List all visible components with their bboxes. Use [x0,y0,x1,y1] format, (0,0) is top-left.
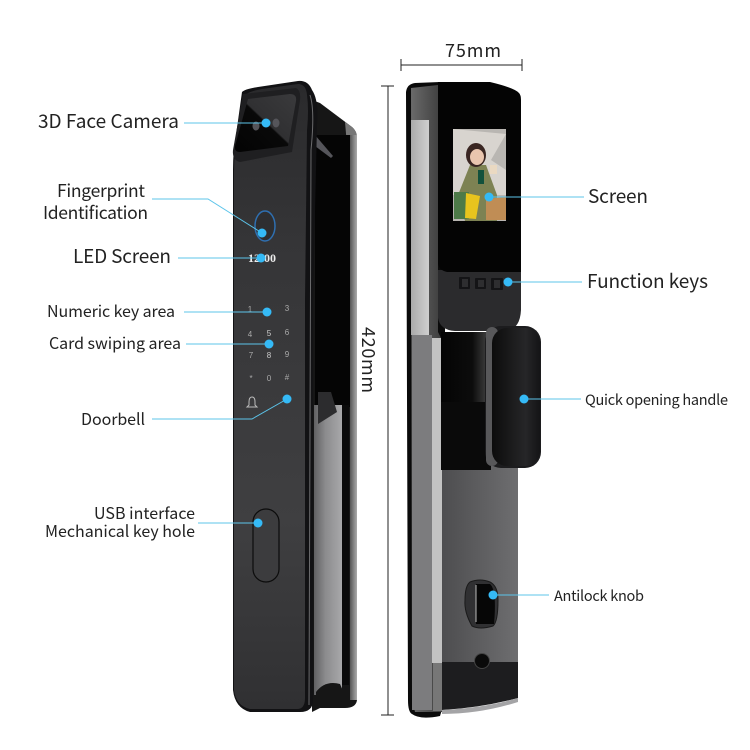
label: LED Screen [73,242,266,269]
dimension: 420mm [356,86,394,715]
label: Function keys [504,267,708,294]
body rear [406,82,445,718]
keypad digits: 5 [267,329,272,338]
label: USB interface and Mechanical key hole: Mechanical key hole [45,518,195,542]
camera bezel [233,88,300,162]
dimension: 420mm: 420mm [356,327,382,393]
lock side body [312,100,357,712]
label: USB interface and Mechanical key hole [45,500,262,542]
control panel [438,270,521,331]
keypad digits: 4 [248,330,253,339]
label: Numeric key area [47,298,272,322]
label: 3D Face Camera [38,107,270,134]
front view of smart lock [233,81,357,712]
keypad digits: 6 [285,328,290,337]
fingerprint ring [255,211,275,241]
keypad digits: 7 [249,351,254,360]
label: Antilock knob: Antilock knob [554,585,644,606]
label: Fingerprint Identification [43,178,266,238]
label: Quick opening handle [520,389,728,410]
bell icon [247,397,257,407]
LED time: 12:00 [248,251,276,265]
keypad digits: 3 [285,304,290,313]
antilock knob [465,580,498,628]
label: Fingerprint Identification: Fingerprint [57,178,145,203]
label: Screen: Screen [588,182,648,209]
label: Doorbell: Doorbell [81,406,145,430]
lower plate [442,440,518,662]
label: USB interface and Mechanical key hole: USB interface [94,500,195,524]
label: 3D Face Camera: 3D Face Camera [38,107,179,134]
keypad digits: 1 [248,305,253,314]
middle back plate [441,332,519,442]
dimension: 75mm [401,37,522,71]
label: Card swiping area [49,330,274,354]
label: Numeric key area: Numeric key area [47,298,175,322]
keypad digits: 9 [285,350,290,359]
screen panel [438,82,521,272]
label: Antilock knob [488,585,644,606]
label: Fingerprint Identification: Identification [43,200,148,225]
label: Function keys: Function keys [587,267,708,294]
label: Doorbell [81,394,292,430]
keypad digits: 8 [267,351,272,360]
function keys [459,277,503,290]
label: Screen [484,182,648,209]
display photo [453,129,506,221]
camera window [235,94,296,152]
label: LED Screen: LED Screen [73,242,171,269]
dimension: 75mm: 75mm [445,37,501,63]
keypad digits: * [249,374,253,383]
lock front face [233,81,317,712]
key hole cover [253,509,279,582]
keypad digits [248,304,290,383]
key hole [474,654,490,668]
label: Card swiping area: Card swiping area [49,330,181,354]
handle [485,326,541,468]
keypad digits: 0 [267,374,272,383]
keypad digits: # [285,373,290,382]
label: Quick opening handle: Quick opening handle [585,389,728,410]
side view of smart lock [406,82,541,718]
